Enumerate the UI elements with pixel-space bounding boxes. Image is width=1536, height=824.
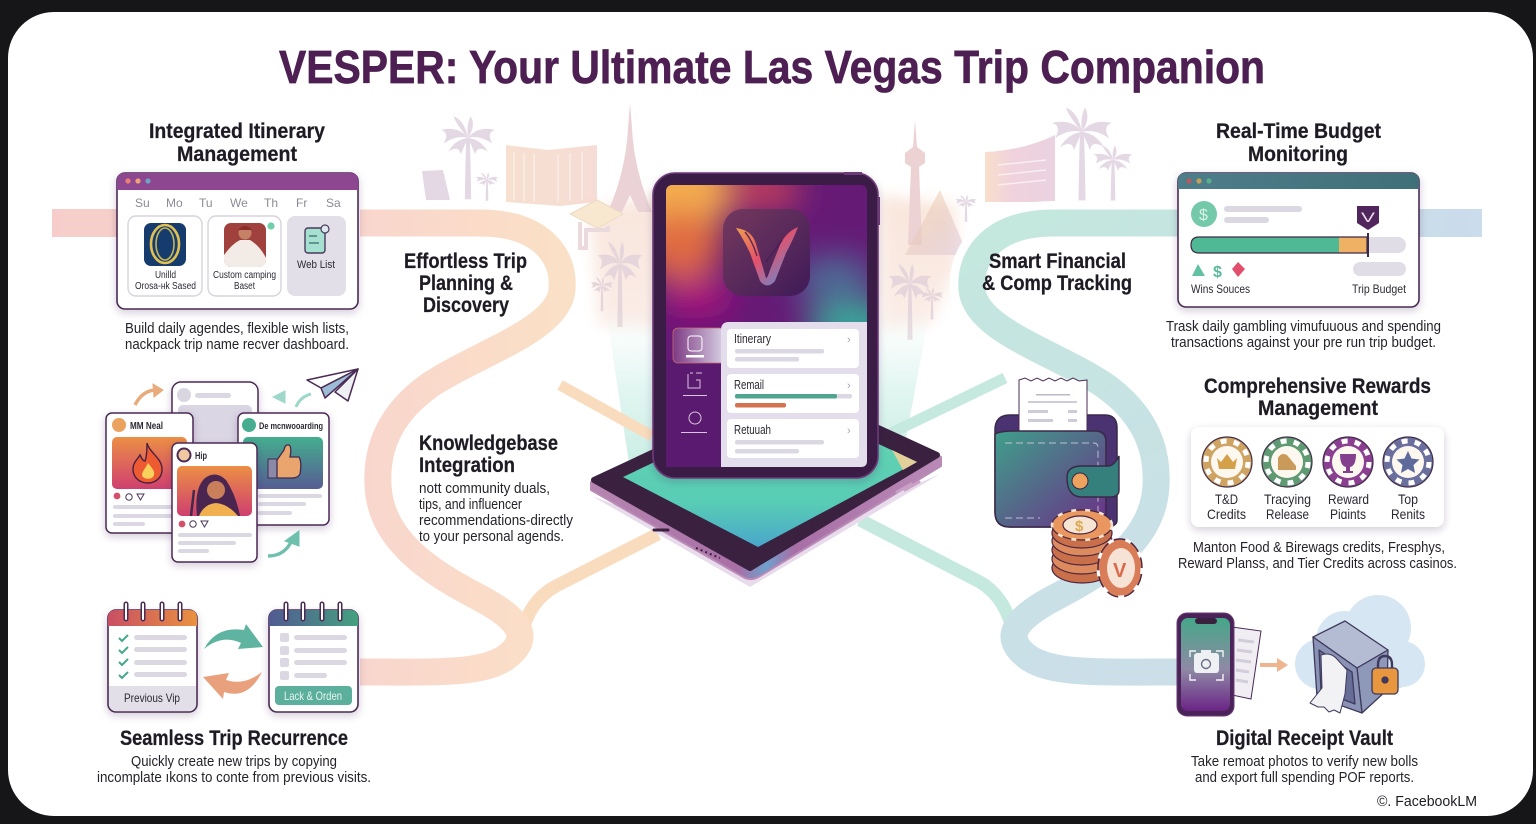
rewards card: Renits xyxy=(1391,506,1425,522)
panel: seamless trip recurrence xyxy=(97,604,371,786)
rewards card: Reward xyxy=(1328,491,1369,507)
vault description: Take remoat photos to verify new bolls xyxy=(1191,753,1418,770)
heading: effortless trip planning: Planning & xyxy=(419,272,513,295)
rewards description xyxy=(1178,539,1457,572)
tablet content panel xyxy=(721,322,867,467)
knowledgebase description: tips, and influencer xyxy=(419,496,522,513)
chip: release xyxy=(1262,437,1312,487)
wallet clasp xyxy=(1067,456,1119,497)
knowledgebase description xyxy=(419,480,573,545)
heading: effortless trip planning: Effortless Trip xyxy=(404,250,527,273)
back card xyxy=(172,382,258,455)
heading: effortless trip planning: Discovery xyxy=(423,294,509,317)
vault description: and export full spending POF reports. xyxy=(1195,769,1414,786)
dollar sign on stack: $ xyxy=(1075,518,1084,535)
coin stack xyxy=(1052,510,1112,583)
panel: social discovery cards xyxy=(106,369,358,562)
calendar window: Orosa-нk Sased xyxy=(135,281,196,292)
calendar window: We xyxy=(230,196,248,210)
rewards card: Tracying xyxy=(1264,491,1311,507)
calendar window: Custom camping xyxy=(213,270,276,281)
icon: arrow up right peach xyxy=(135,384,163,405)
chip: points xyxy=(1323,437,1373,487)
tablet screen gradient xyxy=(666,185,867,467)
panel: comprehensive rewards management xyxy=(1178,375,1457,572)
icon: arrow up right teal xyxy=(268,531,299,556)
heading: effortless trip planning xyxy=(404,250,527,317)
card: thumbs up post: De mcnwooarding xyxy=(259,421,323,432)
row: itinerary: Itinerary xyxy=(734,332,772,346)
rewards description: Manton Food & Birewags credits, Fresphys, xyxy=(1193,539,1445,556)
attribution: ©. FacebookLM xyxy=(1377,793,1477,810)
panel: digital receipt vault xyxy=(1177,595,1425,786)
itinerary description: Build daily agendes, flexible wish lists, xyxy=(125,320,349,337)
knowledgebase description: nott community duals, xyxy=(419,480,550,497)
row: itinerary: › xyxy=(847,334,851,346)
poker chip: V xyxy=(1113,560,1127,582)
itinerary description: nackpack trip name recver dashboard. xyxy=(125,336,349,353)
panel: real-time budget monitoring xyxy=(1166,120,1441,351)
heading: real-time budget: Real-Time Budget xyxy=(1216,120,1381,143)
budget window: V xyxy=(1361,209,1376,225)
icon: arrow left teal xyxy=(273,391,311,407)
calendar window: Web List xyxy=(297,259,335,271)
card: flame post: MM Neal xyxy=(130,421,163,432)
icon: phone scanner xyxy=(1177,613,1234,716)
rewards card: Top xyxy=(1398,491,1418,507)
calendar window: Unilld xyxy=(155,270,176,281)
knowledgebase description: to your personal agends. xyxy=(419,528,564,545)
heading: digital receipt vault: Digital Receipt Vault xyxy=(1216,727,1393,750)
calendar window: Fr xyxy=(296,196,307,210)
row: retuuah: Retuuah xyxy=(734,423,771,437)
panel: integrated itinerary management xyxy=(117,120,358,353)
receipt xyxy=(1019,378,1087,433)
heading: smart financial comp tracking: & Comp Tracking xyxy=(982,272,1132,295)
heading: integrated itinerary: Integrated Itinerary xyxy=(149,120,325,143)
calendar window: Tu xyxy=(199,196,213,210)
calendar window: Su xyxy=(135,196,150,210)
wallet front xyxy=(995,431,1106,527)
heading: real-time budget: Monitoring xyxy=(1248,143,1348,166)
calendar window: Mo xyxy=(166,196,183,210)
heading: real-time budget xyxy=(1216,120,1381,166)
heading: knowledgebase integration: Integration xyxy=(419,454,515,477)
budget window: Trip Budget xyxy=(1352,282,1407,296)
calendar: previous trip: Previous Vip xyxy=(124,691,180,705)
card: thumbs up post xyxy=(238,413,329,525)
icon: cloud xyxy=(1295,595,1425,689)
row: remail xyxy=(727,374,859,413)
calendar window: Th xyxy=(264,196,278,210)
chip: top xyxy=(1383,437,1433,487)
tablet sidebar xyxy=(666,328,725,467)
card: flame post xyxy=(106,413,193,533)
card: influencer post xyxy=(172,443,257,562)
card: influencer post: Hip xyxy=(195,451,207,462)
heading: seamless trip recurrence: Seamless Trip Recurrence xyxy=(120,727,348,750)
row: remail: Remail xyxy=(734,378,764,392)
vault description xyxy=(1191,753,1418,786)
rewards card: T&D xyxy=(1215,491,1238,507)
heading: integrated itinerary xyxy=(149,120,325,166)
recurrence description xyxy=(97,753,371,786)
heading: comprehensive rewards: Comprehensive Rewards xyxy=(1204,375,1431,398)
heading: comprehensive rewards: Management xyxy=(1258,397,1378,420)
icon: teal sync arrow xyxy=(204,624,263,649)
light beam from tablet xyxy=(606,310,930,470)
icon: receipt paper xyxy=(1232,627,1261,699)
icon: paper plane xyxy=(307,369,358,401)
chip: credits xyxy=(1202,437,1252,487)
budget description: Trask daily gambling vimufuuous and spending xyxy=(1166,318,1441,335)
recurrence description: Quickly create new trips by copying xyxy=(131,753,337,770)
heading: smart financial comp tracking xyxy=(982,250,1132,295)
heading: knowledgebase integration: Knowledgebase xyxy=(419,432,558,455)
calendar: previous trip xyxy=(108,604,197,712)
heading: smart financial comp tracking: Smart Financial xyxy=(989,250,1126,273)
arrow to vault xyxy=(1260,658,1288,672)
row: retuuah xyxy=(727,419,859,458)
knowledgebase description: recommendations-directly xyxy=(419,512,573,529)
central flat tablet xyxy=(591,384,941,587)
budget window: Wins Souces xyxy=(1191,282,1250,296)
rewards card: Release xyxy=(1266,506,1309,522)
poker chip xyxy=(1098,539,1142,597)
budget window xyxy=(1178,173,1419,307)
calendar window xyxy=(117,173,358,309)
icon: wallet with receipt and chips xyxy=(995,378,1142,597)
budget description xyxy=(1166,318,1441,351)
budget window: $ xyxy=(1199,207,1208,224)
calendar window: Baset xyxy=(234,281,255,292)
itinerary description xyxy=(125,320,349,353)
title: VESPER: Your Ultimate Las Vegas Trip Companion xyxy=(279,41,1265,93)
rewards card: Piɑints xyxy=(1330,506,1366,522)
left journey road xyxy=(52,223,658,672)
budget description: transactions against your pre run trip budget. xyxy=(1171,334,1436,351)
central upright tablet xyxy=(648,172,883,485)
row: remail: › xyxy=(847,380,851,392)
calendar window: Sa xyxy=(326,196,341,210)
icon: vault with lock xyxy=(1310,621,1398,713)
heading: integrated itinerary: Management xyxy=(177,143,297,166)
calendar: new trip: Lack & Orden xyxy=(284,689,342,703)
las vegas skyline backdrop xyxy=(422,103,1132,340)
budget window: $ xyxy=(1213,264,1222,281)
icon: vesper app logo xyxy=(723,209,810,296)
calendar: new trip xyxy=(269,604,358,712)
row: itinerary xyxy=(727,329,859,368)
heading: comprehensive rewards xyxy=(1204,375,1431,420)
row: retuuah: › xyxy=(847,425,851,437)
rewards description: Reward Planss, and Tier Credits across casinos. xyxy=(1178,555,1457,572)
rewards card: Credits xyxy=(1207,506,1246,522)
rewards card xyxy=(1191,427,1444,527)
right journey road xyxy=(860,223,1482,672)
recurrence description: incomplate ıkons to conte from previous visits. xyxy=(97,769,371,786)
wallet back xyxy=(995,415,1117,527)
heading: knowledgebase integration xyxy=(419,432,558,477)
icon: peach sync arrow xyxy=(203,672,262,699)
